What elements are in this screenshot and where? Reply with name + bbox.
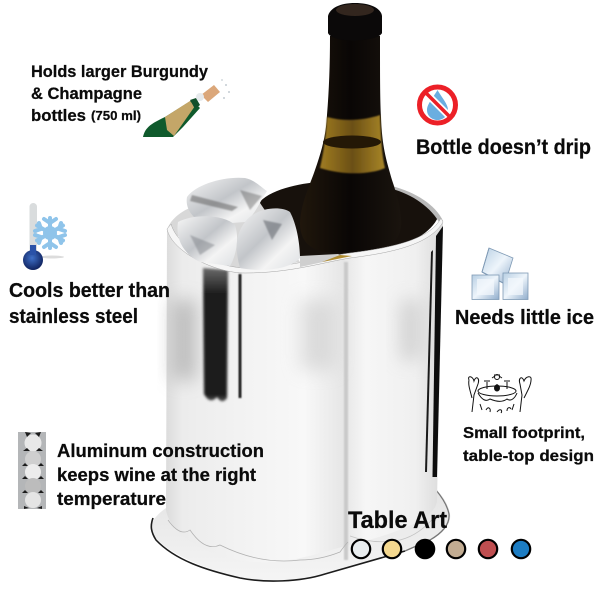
feature text: bottles [31,106,86,125]
feature: holds larger bottles [31,62,230,137]
icon: champagne bottle [143,79,230,137]
bottle glass [300,36,401,253]
scalloped lower line [168,520,348,561]
feature: needs little ice [455,248,594,329]
centre seam [344,262,348,560]
feature text: Small footprint, [463,425,585,442]
bucket interior dark wall [258,182,438,258]
feature text [57,440,264,509]
rim back highlight [392,186,443,224]
wine bucket product photo [151,3,450,581]
reflection: left dark stripes [203,268,228,401]
feature: small footprint [463,374,594,465]
feature: small footprint: table-top design [463,448,594,465]
icon: aluminum swatch [18,432,46,509]
icon: table and chairs [469,374,531,413]
feature: bottle doesn't drip [416,87,591,159]
feature text [31,62,209,125]
wine bottle [300,3,401,253]
amber wine band [320,115,385,173]
feature text: keeps wine at the right [57,464,256,485]
feature text: Cools better than [9,280,170,302]
icon: no drip [420,87,456,123]
reflection: right dark stripes [425,250,433,472]
brand and colour options [348,507,530,558]
feature text: & Champagne [31,84,142,103]
feature text: temperature [57,488,166,509]
feature text: (750 ml) [91,108,141,123]
feature text: Bottle doesn’t drip [416,136,591,159]
icon: thermometer and snowflake [23,203,65,270]
colour swatches [352,540,530,558]
feature: aluminum construction [18,432,264,509]
reflection: soft grey shading [300,300,335,370]
feature text: Needs little ice [455,307,594,329]
ice cubes [177,178,300,270]
icon: ice cubes [472,248,528,300]
brand: Table Art: Table Art [348,507,447,534]
feature text: Aluminum construction [57,440,264,461]
feature: cools better: stainless steel [9,306,138,328]
rim highlight [167,218,443,273]
feature text: Holds larger Burgundy [31,62,209,81]
bottle capsule [328,3,382,41]
left compartment silver [167,203,300,272]
base plate [151,490,450,581]
bucket body [166,222,443,562]
feature: cools better [9,203,170,328]
